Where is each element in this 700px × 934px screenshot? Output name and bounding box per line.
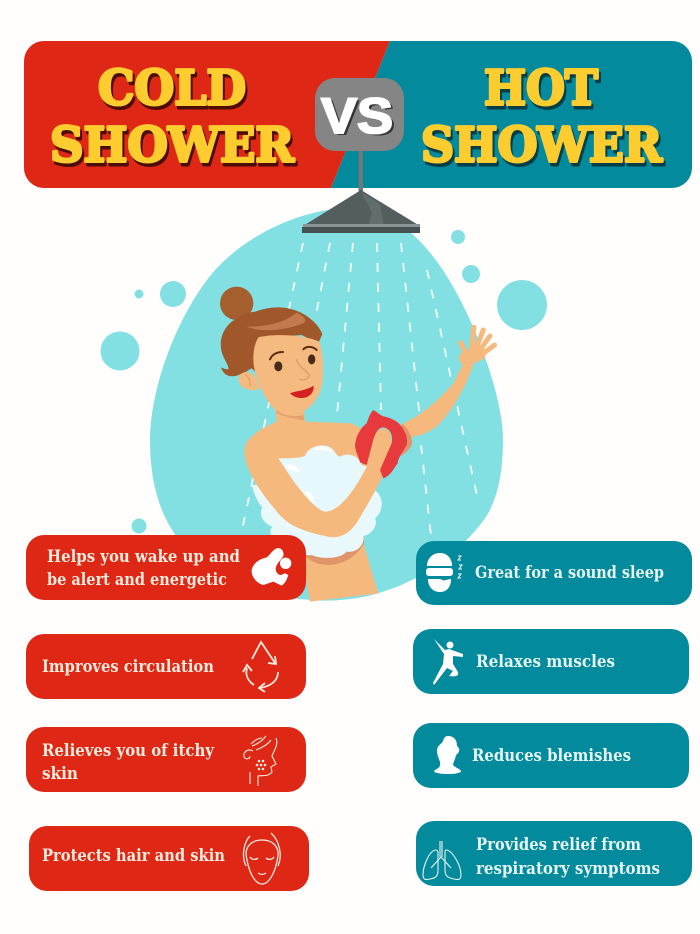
hair highlight (247, 313, 305, 330)
icon: flexing figure (252, 548, 291, 586)
title: hot shower: HOT (484, 60, 598, 116)
illustration backdrop: water blob (150, 208, 503, 601)
upper foam (278, 445, 368, 513)
panel: cold 2 circulation: Improves circulation (42, 657, 214, 676)
bubbles (100, 230, 547, 534)
ear (238, 372, 260, 390)
panel: hot 1 sleep: Great for a sound sleep (475, 563, 664, 582)
eyes (274, 361, 282, 371)
title: cold shower: SHOWER (52, 121, 297, 177)
torso and raised arm (244, 363, 473, 602)
left brow (270, 352, 283, 359)
icon: jumping figure (433, 639, 463, 685)
right brow (303, 347, 317, 350)
neck shadow (277, 410, 304, 421)
hot half (331, 41, 692, 188)
VS badge: VS (324, 90, 396, 146)
shower rim (302, 227, 420, 233)
title: cold shower: SHOWER (50, 118, 295, 174)
shower head (302, 150, 420, 233)
panel: hot 3 blemishes (413, 723, 689, 788)
hair bun (220, 287, 253, 320)
panel: cold 1 wake up: be alert and energetic (47, 570, 227, 589)
shower cone (303, 190, 420, 226)
hair mass (221, 307, 322, 377)
panel: cold 3 itchy skin: Relieves you of itchy (42, 741, 214, 760)
stem over banner (358, 150, 363, 188)
foam highlights (285, 447, 332, 503)
title: cold shower: COLD (100, 64, 248, 120)
panel: cold 3 itchy skin (26, 727, 306, 792)
woman illustration (220, 287, 495, 602)
VS badge (315, 78, 404, 151)
panel: cold 4 hair and skin (29, 826, 309, 891)
title: hot shower (421, 60, 665, 177)
lips (290, 386, 314, 398)
panel: cold 1 wake up (26, 535, 306, 600)
title: hot shower: HOT (486, 64, 600, 120)
panel: hot 4 respiratory (416, 821, 692, 886)
panel: hot 2 muscles (413, 629, 689, 694)
title: cold shower: COLD (98, 60, 246, 116)
panel: hot 1 sleep (416, 541, 692, 605)
panel: hot 4 respiratory: Provides relief from (476, 835, 641, 854)
loofah shade (398, 423, 412, 457)
panel: cold 4 hair and skin: Protects hair and skin (42, 846, 225, 865)
icon: face with closed eyes (243, 833, 280, 884)
icon: woman bust silhouette (434, 736, 461, 774)
panel: hot 2 muscles: Relaxes muscles (476, 652, 615, 671)
head (220, 287, 323, 421)
icon: head with sleep mask (426, 553, 462, 592)
panel: cold 1 wake up: Helps you wake up and (47, 547, 240, 566)
towel shadow band (303, 533, 364, 565)
title: cold shower (50, 60, 297, 177)
VS badge: VS (321, 88, 393, 144)
title: hot shower: SHOWER (421, 118, 663, 174)
water streams (242, 243, 478, 545)
panel: cold 3 itchy skin: skin (42, 764, 78, 783)
face (253, 335, 323, 417)
panel: cold 2 circulation (26, 634, 306, 699)
icon: circulation drop (243, 642, 278, 692)
panel: hot 4 respiratory: respiratory symptoms (476, 859, 660, 878)
shower stem (358, 150, 363, 192)
header banner (24, 41, 692, 188)
panel: hot 3 blemishes: Reduces blemishes (472, 746, 631, 765)
bent arm (244, 429, 391, 537)
loofah (355, 410, 407, 478)
lower foam (252, 477, 382, 558)
nose (297, 360, 309, 380)
raised hand (461, 327, 495, 360)
cold half (24, 41, 390, 188)
icon: face profile with rash (244, 736, 277, 786)
title: hot shower: SHOWER (423, 121, 665, 177)
body (244, 363, 473, 602)
icon: lungs (423, 841, 461, 880)
